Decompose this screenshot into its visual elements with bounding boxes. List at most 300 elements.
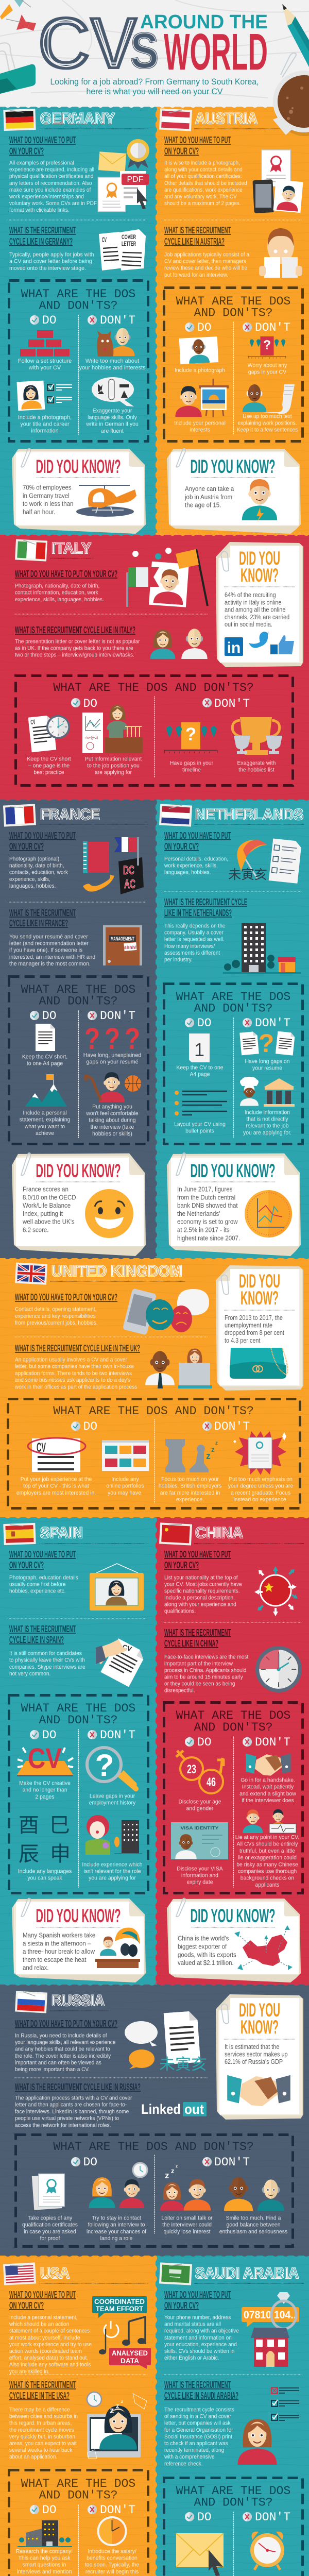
text: Follow a set structure [18, 358, 72, 364]
icon: man and dog [97, 328, 134, 357]
panel: dos and don'ts [8, 1399, 300, 1509]
dont label: DON'T [214, 2156, 250, 2169]
icon: man reading [259, 228, 302, 278]
text: recruitment cycle: CV and cover letter, then managers [164, 258, 246, 265]
icon: man and receipt [243, 384, 295, 414]
text: From 2013 to 2017, the [225, 1314, 283, 1321]
text: information and [181, 1872, 218, 1879]
text: Put too much emphasis on [229, 1476, 293, 1483]
text: the hobbies list [238, 767, 274, 773]
icon: visa identity: VISA IDENTITY [180, 1825, 219, 1831]
flag: italy [15, 539, 47, 562]
flag: netherlands [159, 804, 192, 827]
heading: WHAT IS THE RECRUITMENT CYCLE LIKE IN RUSSIA? [15, 2082, 141, 2092]
title: CVs: C [37, 1, 91, 85]
text: letter and then applicants are chosen for face-to- [15, 2102, 127, 2108]
text: write in German if you [85, 421, 139, 428]
title [21, 2477, 135, 2502]
text: this regard. In urban areas, [9, 2420, 72, 2427]
heading: WHAT IS THE RECRUITMENT [164, 1628, 231, 1638]
panel: dos and don'ts [164, 2478, 303, 2576]
panel: did you know [167, 1153, 301, 1256]
text: what to put: along with your contact details and [164, 167, 243, 173]
dont label: DON'T [100, 2503, 135, 2517]
heading: country: SPAIN [40, 1524, 83, 1541]
text: them to escape the heat [23, 1956, 87, 1963]
text: truthful, but even a little [239, 1848, 295, 1854]
icon: pdf with cursor [120, 171, 149, 209]
heading: CYCLE LIKE IN THE USA? [9, 2391, 70, 2401]
heading: CYCLE LIKE IN SAUDI ARABIA? [164, 2391, 238, 2401]
text: goods, with its exports [178, 1951, 236, 1958]
text: companies. Skype interviews are [9, 1664, 85, 1670]
heading: country: UNITED KINGDOM [52, 1263, 182, 1280]
do label: DO [42, 2503, 57, 2517]
text: A4 page [190, 1071, 210, 1078]
icon: question marks: ? [84, 1022, 100, 1056]
heading [9, 908, 76, 928]
icon: page one [189, 1033, 210, 1062]
icon: magnifier with question mark [87, 1748, 137, 1789]
text: Include a photograph [175, 367, 225, 374]
title: AND DON'TS? [39, 1714, 118, 1727]
text: 62.1% of Russia's GDP [225, 2058, 283, 2065]
icon: helicopter [76, 485, 136, 517]
text: employers are most interested in. [16, 1490, 96, 1496]
text: France scores an [23, 1185, 68, 1193]
title [21, 1702, 135, 1727]
text: benefits conversation [87, 2555, 138, 2562]
text: Go in for a handshake. [241, 1777, 295, 1784]
heading: country: AUSTRIA [195, 110, 258, 127]
heading: WHAT DO YOU HAVE TO PUT [9, 831, 76, 841]
do label [185, 321, 212, 334]
panel: dos and don'ts [15, 2135, 293, 2246]
heading: ON YOUR CV? [9, 1560, 44, 1570]
text: being more important than a CV. [15, 2066, 90, 2073]
panel: italy [14, 539, 303, 785]
text: Have long gaps on [245, 1058, 290, 1065]
text: what you want to [24, 1124, 65, 1130]
text: experience. [176, 1497, 204, 1503]
text: gaps in your CV [248, 369, 287, 376]
heading: ON YOUR CV? [164, 841, 199, 852]
panel: did you know [167, 448, 301, 534]
text: what to put: It is wise to include a photograph, [164, 160, 240, 166]
text: required, along with an objective [164, 2328, 239, 2334]
icon: linked out: Linked [141, 2102, 181, 2117]
text: Photograph, education details [9, 1574, 78, 1581]
icon: certificate burst [233, 1431, 286, 1475]
text: All CVs should be entirely [237, 1841, 298, 1848]
text: at most about yourself. Include [9, 2334, 80, 2341]
text: won't feel comfortable [85, 1110, 139, 1117]
text: landing a role [100, 2235, 132, 2242]
text: your language skills, all relevant experience [15, 2039, 115, 2046]
do label: DO [42, 1009, 57, 1023]
icon: question marks: ? [125, 1022, 140, 1056]
text: with your CV [28, 365, 61, 371]
text: Loiter on small talk or [161, 2215, 213, 2222]
icon: yawning listener [160, 2164, 211, 2211]
heading: recruitment cycle: WHAT IS THE RECRUITMENT [9, 225, 76, 235]
icon: cv question cv: ? [259, 1029, 274, 1058]
icon: creative cv book: CV [28, 1742, 62, 1774]
text: Have gaps in your [170, 760, 213, 767]
icon: umbrella, characters and checklist [228, 839, 302, 884]
panel: did you know [167, 1898, 301, 1982]
heading: recruitment cycle: CYCLE LIKE IN AUSTRIA? [164, 236, 225, 247]
icon: age and gender: 46 [207, 1775, 216, 1789]
text: Include information [245, 1109, 290, 1116]
icon: pencil [282, 4, 309, 67]
icon: management door [103, 925, 142, 965]
icon: person with checklist [238, 2387, 299, 2465]
dont label: DON'T [100, 314, 135, 327]
text: recruitment cycle: moved onto the interview stage. [9, 265, 86, 272]
icon: chess pieces asleep: z [215, 1440, 218, 1446]
icon: cv and cover letter [99, 229, 146, 270]
icon: lie detector [243, 1809, 296, 1833]
text: Also include any software and tools [9, 2362, 91, 2368]
heading: WHAT IS THE RECRUITMENT CYCLE LIKE IN ITALY? [15, 625, 135, 635]
icon: cv and clock [28, 715, 70, 752]
dont label: DON'T [255, 2511, 290, 2524]
icon: china flag with arrows [254, 1566, 298, 1616]
text: background checks on [241, 1875, 294, 1882]
icon: social media [225, 632, 294, 656]
heading [164, 2380, 238, 2401]
text: languages, hobbies. [9, 883, 56, 889]
text: letter (and recommendation letter [9, 940, 89, 947]
text: hobbies. British employers [159, 1483, 221, 1489]
icon: chef and bank [240, 1077, 295, 1107]
icon: age and gender [176, 1751, 224, 1793]
text: effort, analysed data) to stand out. [9, 2355, 88, 2361]
text: the age of 15. [185, 501, 221, 509]
text: two or three steps – interview/group interview/tasks. [15, 652, 134, 658]
panel: dos and don'ts [9, 977, 148, 1144]
flag: austria [159, 108, 192, 131]
text: along with your experience and [164, 1601, 236, 1608]
heading: country: NETHERLANDS [195, 806, 303, 823]
text: Exaggerate with [237, 760, 276, 767]
icon: cv circled [28, 1438, 85, 1472]
text: List your nationality at the top of [164, 1574, 238, 1581]
heading: what to put: WHAT DO YOU HAVE TO PUT [9, 135, 76, 145]
text: Put information relevant [85, 756, 142, 762]
icon: social media: in [227, 639, 241, 656]
text: recruiter will begin this [85, 2569, 139, 2575]
text: companies use thorough [238, 1868, 297, 1875]
icon: certificate [98, 177, 126, 212]
title: CVs: S [130, 22, 159, 79]
icon: envelope [98, 151, 126, 172]
text: 64% of the recruiting [225, 591, 276, 599]
text: In Russia, you need to include details of [15, 2032, 107, 2039]
text: Worry about any [248, 362, 287, 369]
icon: paperclip [281, 53, 296, 77]
heading: ON YOUR CV? [9, 841, 44, 852]
icon: handshake [227, 2075, 290, 2106]
do label [185, 2511, 212, 2524]
text: experience and key responsibilities [15, 1313, 96, 1319]
text: hobbies, experience etc. [9, 1588, 65, 1595]
text: Include a photograph, [18, 414, 72, 421]
text: your hobbies and interests [79, 365, 146, 371]
text: to work in less than [23, 500, 73, 507]
heading: WHAT DO YOU HAVE TO PUT [164, 2290, 231, 2300]
panel: china [159, 1522, 304, 1982]
text: enthusiasm and seriousness [219, 2229, 287, 2235]
icon: binder clip [0, 43, 36, 94]
text: The presentation letter or cover letter is not as popular [15, 638, 140, 645]
icon: linked out: out [184, 2102, 204, 2117]
text: what to put: and any voluntary work. The CV [164, 194, 237, 200]
text: of sending in a CV and cover [164, 2413, 231, 2420]
text: Include a personal statement, [9, 2314, 77, 2321]
text: economy is set to grow [177, 1218, 238, 1226]
heading [164, 1549, 231, 1570]
text: your education, experience and [164, 2342, 237, 2348]
text: Exaggerate your [93, 408, 132, 414]
heading: CYCLE LIKE IN FRANCE? [9, 918, 68, 928]
text: expiry date [186, 1879, 213, 1886]
text: Social Insurance (GOSI) print [164, 2434, 232, 2440]
icon: rosette [127, 139, 149, 169]
text: what to put: experience are required, including all [9, 166, 94, 173]
text: You send your resumé and cover [9, 934, 88, 940]
text: job in Austria from [184, 493, 232, 501]
heading [239, 547, 280, 586]
text: Face-to-face interviews are the most [164, 1654, 248, 1660]
title [176, 990, 290, 1015]
icon: yawning listener: z [165, 2171, 169, 2180]
text: explaining work positions. [237, 420, 297, 427]
panel: dos and don'ts [164, 287, 303, 441]
text: from the Dutch central [177, 1194, 235, 1201]
text: unemployment rate [225, 1321, 272, 1329]
text: services sector makes up [225, 2050, 288, 2058]
icon: speech bubbles and cv [125, 2011, 207, 2073]
subtitle [50, 77, 259, 96]
icon: alarm clock [250, 2532, 284, 2570]
icon: pdf with cursor: PDF [127, 175, 144, 184]
heading: country: FRANCE [40, 806, 100, 823]
text: hobbies or skills) [92, 1131, 132, 1137]
icon: company building [18, 2520, 72, 2547]
text: valued at $2.1 trillion. [178, 1959, 234, 1967]
icon: notebook, flag, patch, phone: AC [124, 877, 135, 891]
icon: chess pieces asleep: z [211, 1445, 215, 1453]
do label: DO [197, 1736, 212, 1749]
heading: WHAT DO YOU HAVE TO PUT ON YOUR CV? [15, 1292, 117, 1302]
panel: spain [3, 1523, 149, 1982]
icon: umbrella, characters and checklist: 未寅亥 [228, 868, 267, 882]
text: what to put: physical qualification certificates and [9, 173, 93, 180]
text: isn't relevant for the role [83, 1868, 141, 1875]
text: aim to be around 15 minutes early [164, 1674, 243, 1681]
text: specific nationality requirements. [164, 1588, 240, 1595]
text: to check if an applicant was [164, 2441, 228, 2447]
text: what to put: all of your qualification certificates. [164, 174, 242, 180]
text: and among all the online [225, 606, 286, 614]
heading [164, 897, 247, 918]
text: achieve [36, 1130, 54, 1137]
text: Index, putting it [23, 1210, 63, 1217]
text: work experience, skills, [164, 862, 218, 869]
heading: country: USA [40, 2265, 70, 2282]
heading: WHAT DO YOU HAVE TO PUT [164, 1549, 231, 1560]
icon: gaps [248, 336, 286, 359]
do label [185, 1016, 212, 1030]
heading [164, 2290, 231, 2311]
text: highest rate since 2007. [177, 1234, 240, 1242]
text: important part of the interview [164, 1660, 233, 1667]
text: the recruitment cycle moves [9, 2427, 74, 2433]
text: Keep the CV short [27, 756, 71, 762]
do label [185, 1736, 212, 1749]
text: Personal details, education, [164, 856, 228, 862]
heading: what to put: ON YOUR CV? [9, 146, 44, 157]
icon: two men smiling [224, 2177, 284, 2211]
heading: ON YOUR CV? [9, 2300, 44, 2311]
icon: waiting at computer: z [116, 2402, 119, 2410]
text: per industry. [164, 957, 193, 963]
title: WHAT ARE THE DOS [176, 295, 290, 308]
icon: notebook, flag, patch, phone: DC [123, 863, 134, 877]
heading [164, 1628, 231, 1649]
text: top of your CV - this is what [23, 1483, 89, 1489]
heading: country: ITALY [52, 540, 91, 557]
do label [30, 1728, 57, 1742]
heading: WHAT IS THE RECRUITMENT [164, 2380, 231, 2390]
icon: page one: 1 [194, 1039, 204, 1060]
text: letter, but some companies have their own in-house [15, 1363, 134, 1370]
icon: hieroglyph speech bubble [92, 377, 134, 406]
text: what to put: work experience/internships and [9, 194, 84, 200]
text: Your phone number, address [164, 2314, 231, 2321]
text: Include a personal [23, 1110, 67, 1116]
text: Keep it to a few sentences [237, 427, 298, 433]
text: qualifications. [164, 1608, 196, 1615]
text: very quickly but, in suburban [9, 2434, 75, 2440]
subtitle: here is what you will need on your CV [87, 87, 222, 96]
text: biggest exporter of [178, 1943, 227, 1951]
icon: yawning listener: z [176, 2164, 178, 2168]
icon: push pins [0, 0, 36, 31]
do label [30, 2503, 57, 2517]
text: dropped from 8 per cent [225, 1329, 285, 1336]
text: recruitment cycle: put forward for an interview. [164, 272, 228, 278]
panel: russia [14, 1991, 303, 2246]
flag: spain [3, 1523, 36, 1545]
heading: recruitment cycle [164, 225, 231, 247]
icon: cv and clock: CV [30, 718, 36, 726]
title: WHAT ARE THE DOS AND DON'TS? [53, 2140, 254, 2154]
text: and some businesses ask applicants to do a day's [15, 1377, 130, 1383]
panel: dos and don'ts [15, 676, 293, 785]
text: your CV. Most jobs currently have [164, 1581, 242, 1588]
text: you can speak [27, 1875, 62, 1882]
icon: languages: 申 [50, 1843, 71, 1866]
text: and extend a slight bow [239, 1791, 296, 1797]
text: It is estimated that the [225, 2043, 280, 2050]
title: WHAT ARE THE DOS [21, 287, 135, 301]
title: AND DON'TS? [39, 994, 118, 1008]
panel: usa [3, 2262, 151, 2576]
title [176, 295, 290, 319]
icon: boy [242, 479, 277, 521]
text: experience, skills, [9, 876, 50, 883]
text: An application usually involves a CV and a cover [15, 1357, 127, 1363]
text: action words (coordinated team [9, 2348, 82, 2354]
icon: china export map [234, 1925, 293, 1970]
text: for proof [40, 2235, 60, 2242]
text: to one A4 page [27, 1060, 63, 1067]
icon: action word bubbles: COORDINATED [94, 2298, 145, 2306]
text: the Netherlands' [177, 1210, 220, 1217]
panel: france [3, 804, 149, 1256]
icon: cv and cover letter: CV [102, 235, 107, 244]
text: are fluent [101, 428, 124, 434]
text: Have long, unexplained [83, 1052, 141, 1059]
icon: languages [19, 1814, 71, 1866]
text: or they could be seen as being [164, 1681, 235, 1687]
title: WHAT ARE THE DOS [176, 1709, 290, 1722]
icon: question marks: ? [105, 1022, 120, 1056]
text: and no longer than [22, 1787, 67, 1793]
text: statement of a couple of sentences [9, 2328, 90, 2334]
heading: ON YOUR CV? [164, 2300, 199, 2311]
heading: CYCLE LIKE IN SPAIN? [9, 1635, 64, 1645]
text: Layout your CV using [174, 1121, 226, 1128]
text: too soon. Typically, the [85, 2562, 139, 2568]
text: you are applying for. [243, 1130, 291, 1136]
title [176, 1709, 290, 1734]
text: Lie at any point in your CV. [235, 1834, 299, 1841]
heading: what to put [9, 135, 76, 157]
panel: did you know [12, 1153, 146, 1256]
icon: action word bubbles: ANALYSED [112, 2349, 148, 2357]
icon: one page [36, 1024, 55, 1051]
text: interests [190, 427, 210, 433]
text: recruitment cycle: a CV and cover letter before being [9, 259, 92, 265]
icon: cv and cover letter: COVER [122, 233, 136, 241]
title: WHAT ARE THE DOS [21, 2477, 135, 2490]
dont label: DON'T [255, 321, 290, 334]
icon: hand holding cv: CV [122, 1643, 133, 1653]
heading: WHAT DO YOU HAVE TO PUT [9, 1549, 76, 1560]
text: you may have. [108, 1490, 143, 1496]
text: letter, but companies will ask [164, 2420, 231, 2427]
text: interviews and mention [17, 2569, 72, 2575]
text: if the interviewer does [242, 1798, 294, 1804]
text: China is the world's [178, 1935, 229, 1942]
heading: LIKE IN THE NETHERLANDS? [164, 908, 232, 918]
icon: action word bubbles: DATA [121, 2357, 139, 2365]
text: contacts, education, work [9, 869, 68, 876]
text: following an interview to [88, 2222, 145, 2228]
text: what to put: any letters of recommendation. Also [9, 180, 92, 187]
text: usually come first before [9, 1581, 66, 1588]
text: qualification certificates [22, 2222, 78, 2228]
text: which should be an action [9, 2321, 69, 2328]
do label: DO [197, 1016, 212, 1030]
text: that is not directly [246, 1116, 288, 1123]
text: the role. The cover letter is also incredibly [15, 2053, 111, 2059]
text: work in their offices as part of the application process [14, 1384, 137, 1390]
